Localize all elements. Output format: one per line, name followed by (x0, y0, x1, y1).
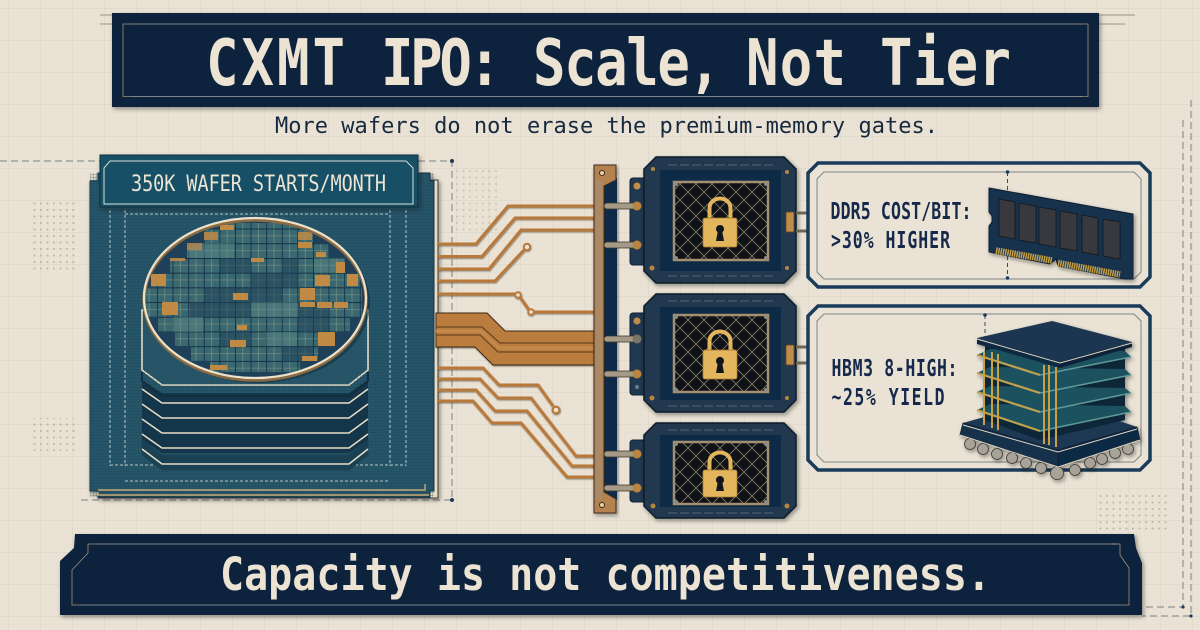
gate 2 clamp and pins (604, 313, 646, 395)
icon: padlock 3 (703, 452, 737, 497)
conclusion banner (60, 534, 1142, 615)
gate 2 right connector (786, 345, 808, 365)
dashed inner lines (110, 210, 406, 481)
gate 1 body (644, 157, 796, 283)
DDR5 text: DDR5 COST/BIT: (830, 198, 971, 225)
callout: HBM3 yield (808, 306, 1150, 480)
title text: Not (746, 25, 846, 100)
icon: HBM stacked memory (960, 321, 1140, 480)
upper traces (438, 206, 594, 315)
wafer (140, 218, 370, 383)
title text: Scale, (533, 25, 721, 100)
title text: IPO: (381, 25, 501, 100)
icon: DDR memory module (989, 188, 1133, 279)
orange dies (151, 225, 358, 370)
DDR5 text (830, 198, 971, 254)
panel layers (90, 173, 438, 498)
teal layers (977, 349, 1131, 432)
gold pillars (984, 352, 1056, 447)
HBM3 text: ~25% YIELD (832, 384, 945, 411)
gate 2 body (644, 294, 796, 412)
gate 3 window (674, 442, 768, 504)
gate 1 window (674, 182, 768, 260)
title text: Tier (880, 25, 1011, 100)
banner text: 350K WAFER STARTS/MONTH (131, 171, 386, 196)
conclusion text: Capacity is not competitiveness. (220, 549, 991, 602)
bus bar (594, 165, 617, 513)
subtitle: More wafers do not erase the premium-memory gates. (275, 114, 938, 139)
gate 3 body (644, 423, 796, 518)
title text: CXMT (206, 25, 345, 100)
callout: DDR5 cost per bit (808, 163, 1150, 287)
capacity banner (100, 155, 418, 207)
gate 1 right connector (786, 212, 808, 232)
dark core (985, 345, 1125, 440)
lower traces (438, 368, 594, 477)
DDR5 text: >30% HIGHER (831, 227, 950, 254)
gate 3 (604, 423, 796, 518)
gate 1 (604, 157, 808, 283)
HBM3 text (832, 355, 958, 411)
panel: wafer capacity (90, 155, 438, 498)
connector traces (436, 206, 594, 477)
title banner (112, 13, 1099, 107)
gate 1 clamp and pins (604, 178, 646, 265)
icon: padlock 1 (703, 198, 737, 247)
base substrate (960, 398, 1140, 467)
icon: padlock 2 (703, 332, 737, 379)
solder balls (964, 438, 1134, 480)
die colour variation (190, 258, 329, 361)
thick bus (436, 313, 594, 365)
gate 3 clamp and pins (604, 440, 646, 502)
gate 2 window (674, 315, 768, 392)
top plate (977, 321, 1132, 368)
plate stack (142, 310, 368, 470)
HBM3 text: HBM3 8-HIGH: (832, 355, 958, 382)
gate 2 (604, 294, 808, 412)
